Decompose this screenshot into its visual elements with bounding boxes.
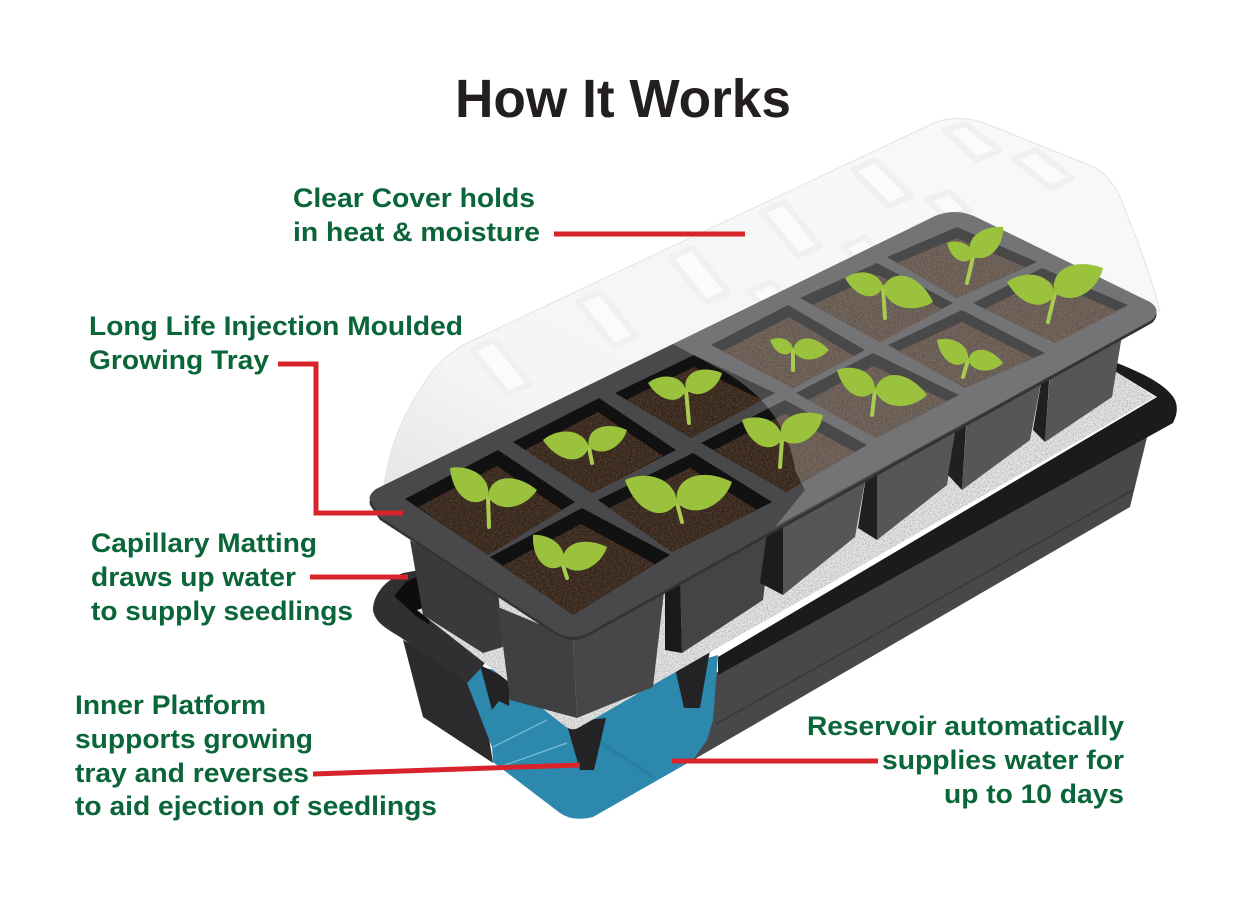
label: reservoir — [807, 711, 1125, 809]
label: reservoir: up to 10 days — [944, 779, 1124, 809]
label: inner platform: supports growing — [75, 724, 313, 754]
support legs of inner platform — [480, 650, 710, 770]
label: growing tray: Growing Tray — [89, 345, 269, 375]
label: capillary matting: Capillary Matting — [91, 528, 317, 558]
leader line: inner platform — [313, 765, 580, 774]
title: How It Works — [455, 69, 791, 129]
label: capillary matting: to supply seedlings — [91, 596, 353, 626]
label: inner platform — [75, 690, 437, 821]
label: reservoir: Reservoir automatically — [807, 711, 1124, 741]
leader line: growing tray — [278, 364, 403, 513]
label: inner platform: to aid ejection of seedlings — [75, 791, 437, 821]
label: reservoir: supplies water for — [882, 745, 1125, 775]
clear cover dome — [383, 118, 1160, 492]
cover haze over rear of tray — [671, 212, 1157, 527]
growing tray rim — [370, 212, 1157, 640]
leader line: capillary matting — [310, 574, 408, 580]
leader line: reservoir — [672, 758, 878, 764]
seedling cell walls — [405, 227, 1128, 615]
seedlings — [441, 217, 1110, 578]
reservoir tray rim — [373, 363, 1177, 683]
label: capillary matting — [91, 528, 353, 626]
label: clear cover: Clear Cover holds — [293, 183, 535, 213]
label: growing tray — [89, 311, 463, 375]
label: clear cover: in heat & moisture — [293, 217, 540, 247]
label: clear cover — [293, 183, 540, 247]
label: capillary matting: draws up water — [91, 562, 297, 592]
capillary matting — [417, 370, 1155, 729]
leader line: clear cover — [554, 232, 745, 236]
growing tray pots — [410, 335, 1122, 718]
label: inner platform: tray and reverses — [75, 758, 309, 788]
cutaway blue water reservoir — [467, 655, 718, 819]
outer reservoir tray body — [403, 425, 1150, 763]
label: inner platform: Inner Platform — [75, 690, 266, 720]
soil in cells — [418, 238, 1117, 615]
label: growing tray: Long Life Injection Moulded — [89, 311, 463, 341]
